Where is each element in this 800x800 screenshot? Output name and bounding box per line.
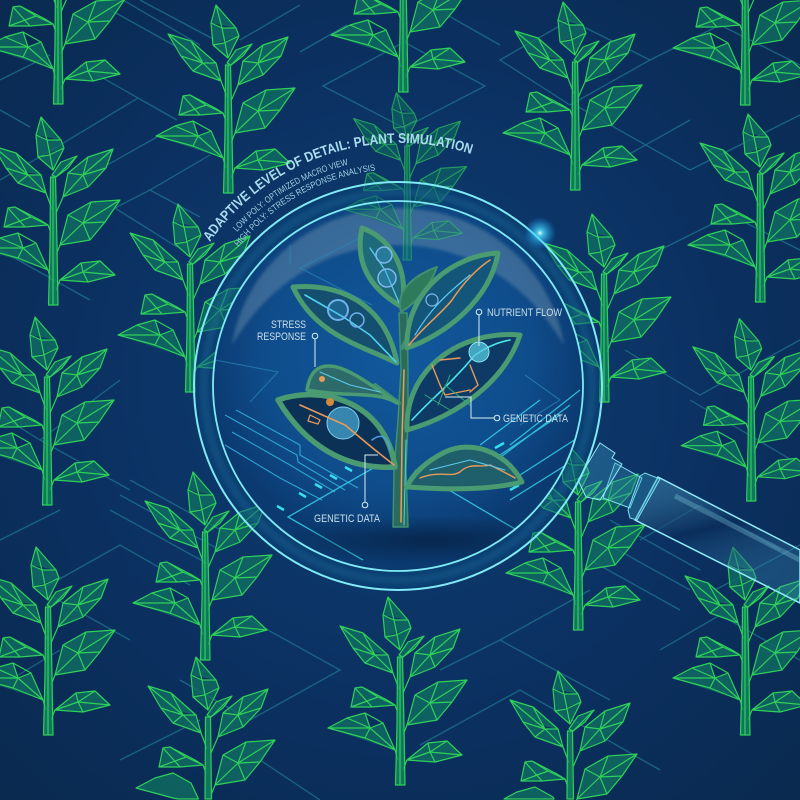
magnifying glass handle [578,443,800,603]
stem [375,313,420,527]
callout: genetic data bottom: GENETIC DATA [314,513,381,525]
leaf: small left [307,366,397,403]
lens circuit traces [215,238,590,565]
callout: nutrient flow: NUTRIENT FLOW [487,307,563,319]
callout: genetic data bottom [314,455,381,525]
central high-poly plant [278,228,522,527]
lens glow ring [204,192,592,580]
leaf: lower right [407,447,522,489]
lens glass [194,182,602,590]
subtitle: low poly: LOW POLY: OPTIMIZED MACRO VIEW [232,158,347,232]
ghost plant seen through lens [344,202,463,260]
callout: genetic data right [445,397,569,425]
leaf: upper right [407,253,498,348]
outer rim [194,182,602,590]
callout: stress response: STRESS [271,319,306,331]
leaf: lower left [278,395,395,467]
callout: nutrient flow [476,307,563,346]
leaf: small top [400,267,437,312]
callout: stress response: RESPONSE [257,331,306,343]
lens flare [524,217,556,249]
inner rim [213,201,583,571]
callout: genetic data right: GENETIC DATA [503,413,569,425]
leaf: middle right [407,335,520,430]
subtitle: high poly: HIGH POLY: STRESS RESPONSE ANALYSIS [234,164,375,246]
title: ADAPTIVE LEVEL OF DETAIL: PLANT SIMULATION [204,133,474,242]
plant floor shadow [308,520,515,560]
magnifying glass lens [193,181,603,591]
leaf: top [360,228,404,307]
callout: stress response [257,319,318,367]
lens inner disc [213,201,583,571]
lens dome crescent [232,208,564,345]
leaf: upper left [293,286,397,363]
